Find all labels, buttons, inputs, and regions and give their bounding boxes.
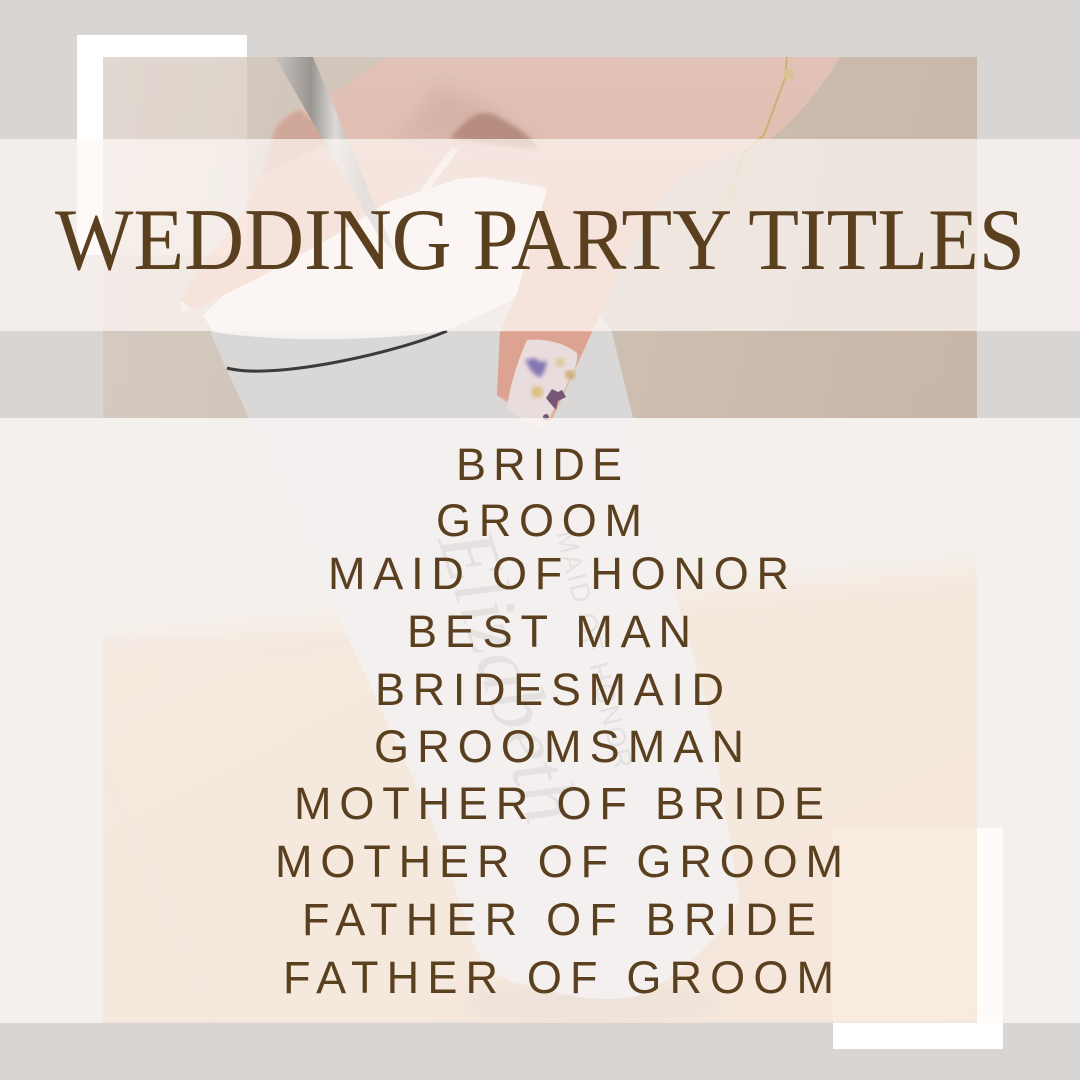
list of wedding party titles: BEST MAN [407,606,691,657]
list of wedding party titles: GROOM [436,495,642,546]
photo: hand holding engraved tumbler: Elizabeth [421,518,596,833]
list of wedding party titles: GROOMSMAN [374,721,744,772]
list of wedding party titles: FATHER OF BRIDE [302,894,816,945]
translucent title band [0,139,1080,331]
list of wedding party titles: BRIDE [456,439,622,490]
list of wedding party titles [275,439,843,1003]
translucent list band [0,418,1080,1023]
photo: hand holding engraved tumbler [103,57,977,1023]
list of wedding party titles: MOTHER OF BRIDE [294,778,824,829]
photo: hand holding engraved tumbler: MAID OF HONOR [550,527,639,774]
list of wedding party titles: MOTHER OF GROOM [275,836,843,887]
list of wedding party titles: FATHER OF GROOM [283,952,834,1003]
white corner frame: top left [77,35,247,255]
list of wedding party titles: MAID OF HONOR [328,548,789,599]
list of wedding party titles: BRIDESMAID [375,664,724,715]
title: WEDDING PARTY TITLES [55,192,1025,289]
white corner frame: bottom right [833,828,1003,1049]
